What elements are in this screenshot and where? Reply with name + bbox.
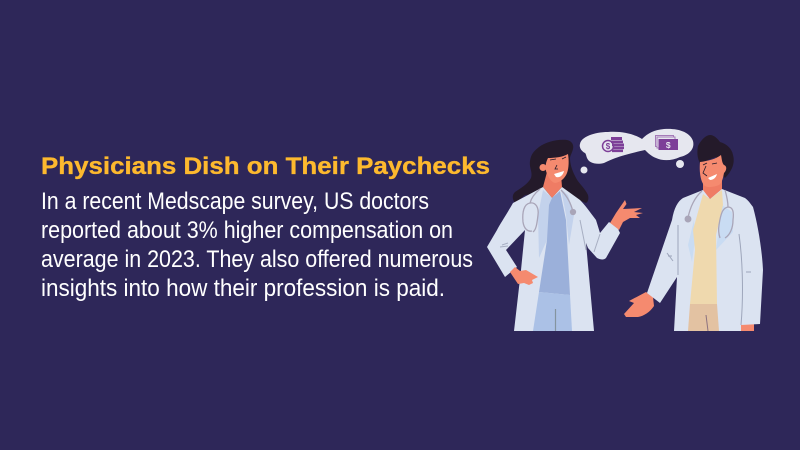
stethoscope — [523, 189, 576, 232]
thought bubbles — [580, 129, 693, 174]
icon: cash: $ — [666, 140, 671, 150]
body text: insights into how their profession is paid. — [41, 275, 445, 302]
figure: female doctor — [487, 140, 643, 331]
neck — [703, 176, 722, 199]
yellow scrub — [690, 190, 723, 304]
right hand — [741, 322, 754, 331]
white coat — [647, 189, 763, 331]
face — [700, 155, 726, 187]
body text — [41, 188, 473, 302]
trousers — [533, 292, 572, 331]
left hand — [624, 292, 654, 317]
neck — [543, 172, 562, 198]
face — [546, 154, 569, 183]
title: Physicians Dish on Their Paychecks — [41, 153, 490, 180]
trousers — [688, 304, 719, 331]
right hand — [610, 200, 643, 230]
stethoscope — [685, 190, 733, 238]
coat creases — [500, 220, 600, 252]
left hand — [510, 267, 538, 285]
hair — [513, 140, 588, 203]
inner shirt shadow — [688, 205, 733, 262]
body text: In a recent Medscape survey, US doctors — [41, 188, 429, 215]
hair — [697, 135, 734, 178]
figure: male doctor — [624, 135, 763, 331]
body text: average in 2023. They also offered numerous — [41, 246, 473, 273]
body text: reported about 3% higher compensation on — [41, 217, 453, 244]
white coat — [487, 187, 620, 331]
icon: coins: $ — [606, 142, 611, 151]
coat creases — [667, 225, 751, 325]
scrub — [539, 191, 570, 295]
ear — [540, 164, 546, 171]
